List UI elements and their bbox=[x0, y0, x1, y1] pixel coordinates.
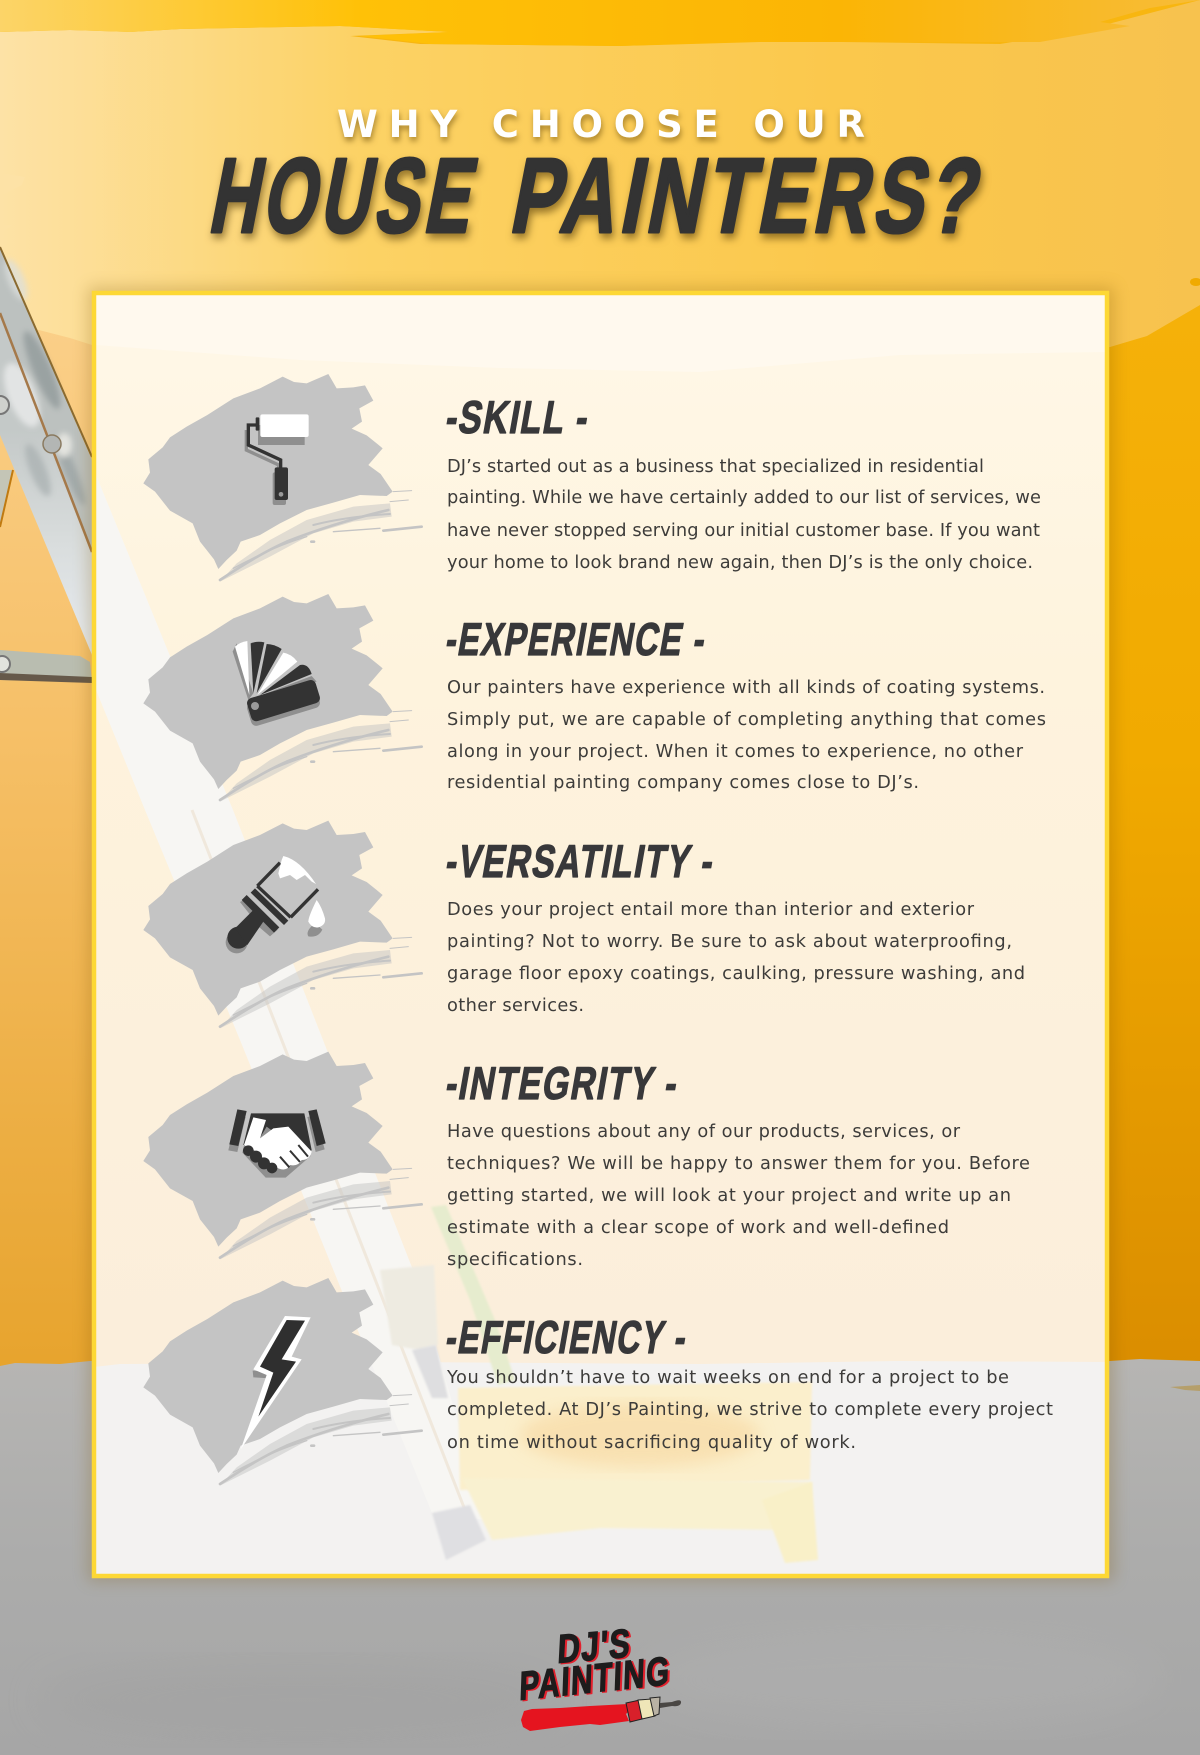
item 2: experience bbox=[143, 594, 1046, 802]
ladder spreader bar bbox=[0, 650, 92, 682]
description: efficiency: on time without sacrificing quality of work. bbox=[447, 1432, 856, 1453]
top light brush in panel bbox=[96, 295, 1105, 372]
finger separators bbox=[280, 1145, 308, 1167]
description: versatility: Does your project entail more than interior and exterior bbox=[447, 899, 975, 920]
wall background bbox=[0, 0, 1200, 1375]
title: house painters bbox=[203, 136, 997, 255]
logo text: DJ'S bbox=[557, 1620, 633, 1672]
description: versatility: other services. bbox=[447, 995, 584, 1016]
item 3: versatility bbox=[143, 821, 1025, 1028]
white hand bbox=[244, 1117, 312, 1169]
floor part of panel bbox=[94, 1361, 1107, 1576]
ladder white rail bbox=[0, 313, 92, 655]
cuffs bbox=[229, 1109, 247, 1146]
icon: paint roller bbox=[246, 414, 309, 505]
item 1: skill bbox=[143, 374, 1041, 582]
description: experience: Simply put, we are capable of completing anything that comes bbox=[447, 709, 1046, 730]
description: versatility: garage floor epoxy coatings, caulking, pressure washing, and bbox=[447, 963, 1025, 984]
ladder bolts bbox=[0, 656, 10, 672]
description: skill: painting. While we have certainly added to our list of services, we bbox=[447, 487, 1041, 508]
fan body bbox=[246, 679, 321, 723]
item 5: efficiency bbox=[143, 1278, 1053, 1486]
ghost rail bbox=[96, 477, 440, 1362]
description: experience: along in your project. When it comes to experience, no other bbox=[447, 741, 1024, 762]
description: experience bbox=[447, 677, 1046, 793]
fan shadow bbox=[233, 643, 253, 700]
ghosted ladder and tray bbox=[96, 475, 818, 1563]
heading: skill: -SKILL - bbox=[442, 391, 594, 443]
main panel bbox=[94, 293, 1107, 1576]
ladder rail edges bbox=[0, 313, 92, 552]
left lighter wall bbox=[0, 300, 92, 1375]
description: integrity: getting started, we will look at your project and write up an bbox=[447, 1185, 1011, 1206]
brush swatch and lightning icon bbox=[143, 1278, 422, 1486]
floor shading patches bbox=[40, 1660, 560, 1740]
description: integrity: specifications. bbox=[447, 1249, 583, 1270]
ghost roller bbox=[380, 1265, 438, 1350]
description: integrity bbox=[447, 1121, 1030, 1270]
ladder mottling bbox=[0, 257, 90, 507]
brush swatch and handshake icon bbox=[143, 1052, 422, 1259]
logo text bbox=[519, 1620, 671, 1709]
description: experience: Our painters have experience with all kinds of coating systems. bbox=[447, 677, 1045, 698]
description: efficiency: You shouldn’t have to wait weeks on end for a project to be bbox=[446, 1367, 1009, 1388]
description: skill: your home to look brand new again, then DJ’s is the only choice. bbox=[447, 552, 1033, 573]
right paint drop bbox=[1190, 278, 1200, 286]
description: versatility: painting? Not to worry. Be sure to ask about waterproofing, bbox=[447, 931, 1012, 952]
logo: DJ's Painting bbox=[519, 1620, 681, 1731]
brush swatch and paint brush icon bbox=[143, 821, 422, 1028]
heading: efficiency: -EFFICIENCY - bbox=[442, 1311, 692, 1363]
description: versatility bbox=[447, 899, 1025, 1016]
description: skill: DJ’s started out as a business that specialized in residential bbox=[447, 456, 984, 477]
ladder bbox=[0, 247, 92, 683]
icon: lightning bolt bbox=[241, 1316, 311, 1449]
left paint drips bbox=[0, 173, 25, 235]
logo red brush stroke bbox=[521, 1704, 630, 1731]
dark knuckles bbox=[243, 1145, 277, 1173]
ladder lower bracket bbox=[0, 470, 12, 522]
description: integrity: techniques? We will be happy to answer them for you. Before bbox=[447, 1153, 1030, 1174]
brush ferrule bbox=[242, 895, 279, 933]
ladder outer rail bbox=[0, 247, 92, 555]
icon: paint brush bbox=[226, 856, 325, 953]
logo paint brush bbox=[626, 1697, 681, 1722]
ghost green handle bbox=[431, 1205, 515, 1385]
title: why choose our: WHY CHOOSE OUR bbox=[337, 103, 865, 146]
description: skill: have never stopped serving our initial customer base. If you want bbox=[447, 520, 1040, 541]
ghost tray bbox=[458, 1382, 812, 1490]
description: integrity: estimate with a clear scope of work and well-defined bbox=[447, 1217, 949, 1238]
ghost ladder foot bbox=[432, 1505, 486, 1560]
title: house painters: PAINTERS? bbox=[504, 136, 997, 255]
icon: colour fan deck bbox=[233, 641, 321, 727]
heading: versatility: -VERSATILITY - bbox=[442, 835, 719, 887]
brush frame bbox=[257, 863, 318, 917]
brush swatch and colour fan icon bbox=[143, 594, 422, 802]
description: efficiency: completed. At DJ’s Painting, we strive to complete every project bbox=[447, 1399, 1053, 1420]
icon: handshake bbox=[228, 1109, 326, 1178]
fan blades bbox=[235, 641, 249, 695]
floor bbox=[0, 1359, 1200, 1755]
top saturated band bbox=[0, 0, 1200, 46]
description: integrity: Have questions about any of our products, services, or bbox=[447, 1121, 961, 1142]
logo text: PAINTING bbox=[519, 1648, 671, 1709]
brush handle bbox=[227, 927, 249, 949]
title: house painters: HOUSE bbox=[203, 136, 491, 255]
heading: integrity: -INTEGRITY - bbox=[442, 1057, 683, 1109]
description: experience: residential painting company comes close to DJ’s. bbox=[447, 772, 919, 793]
description: skill bbox=[447, 456, 1041, 573]
item 4: integrity bbox=[143, 1052, 1030, 1270]
white paint bbox=[278, 856, 316, 884]
heading: experience: -EXPERIENCE - bbox=[442, 613, 711, 665]
description: efficiency bbox=[446, 1367, 1053, 1453]
panel drop shadow bbox=[88, 287, 1114, 1581]
upper light paint band bbox=[0, 0, 1200, 347]
panel yellow border bbox=[94, 293, 1107, 1576]
dark hand bbox=[243, 1113, 312, 1157]
brush swatch and roller icon bbox=[143, 374, 422, 582]
